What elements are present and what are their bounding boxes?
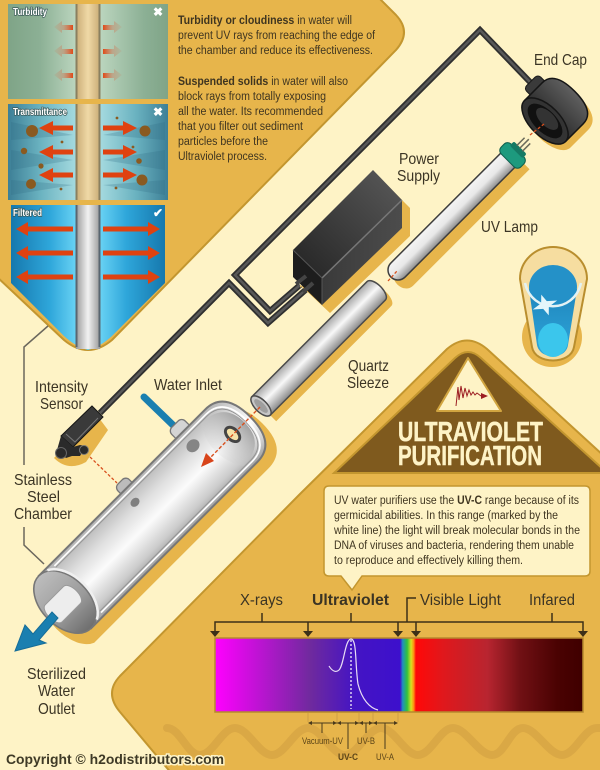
text: suspended solids paragraph: block rays from totally exposing <box>178 91 326 103</box>
cylinder <box>14 383 276 645</box>
callout: germicidal abilities. In this range (marked by the <box>334 510 558 522</box>
label: quartz sleeze: Quartz <box>348 358 389 375</box>
uv-c marker <box>350 640 352 709</box>
spectrum labels: Infared <box>529 592 575 609</box>
callout <box>324 486 590 590</box>
callout: DNA of viruses and bacteria, rendering them unable <box>334 540 574 552</box>
text: suspended solids paragraph: that you filter out sediment <box>178 121 304 133</box>
label: stainless steel chamber: Stainless <box>14 472 72 489</box>
uv range scale: UV-A <box>376 752 394 762</box>
leader line: stainless steel chamber <box>24 326 48 564</box>
callout: to reproduce and effectively killing them. <box>334 555 523 567</box>
arrows <box>16 222 160 284</box>
label: stainless steel chamber: Steel <box>27 489 60 506</box>
uv range scale <box>302 713 398 762</box>
text: turbidity paragraph <box>178 15 376 57</box>
label: turbidity: Turbidity <box>13 7 47 18</box>
power supply <box>293 170 410 313</box>
dashed line: lamp to cap <box>388 124 544 281</box>
icon: glass of water <box>520 247 587 367</box>
label: quartz sleeze: Sleeze <box>347 375 389 392</box>
uv range scale: UV-B <box>357 736 375 746</box>
spectrum brackets <box>210 598 588 637</box>
spectrum labels: Visible Light <box>420 592 502 609</box>
text: turbidity paragraph: the chamber and reduce its effectiveness. <box>178 45 373 57</box>
dashed line: sensor to chamber <box>90 457 117 483</box>
arrow: sterilized water outlet <box>15 612 58 651</box>
label: intensity sensor: Sensor <box>40 396 84 413</box>
label: water inlet: Water Inlet <box>154 377 222 394</box>
label: quartz sleeze <box>347 358 389 392</box>
panel: transmittance <box>8 104 168 200</box>
label: transmittance: Transmittance <box>13 107 67 118</box>
intensity sensor <box>54 406 108 466</box>
label: sterilized water outlet: Water <box>38 683 76 700</box>
arrows <box>39 121 137 182</box>
label: power supply: Power <box>399 151 440 168</box>
uv range scale: Vacuum-UV <box>302 736 343 746</box>
cables <box>100 30 530 413</box>
label: power supply: Supply <box>397 168 440 185</box>
end cap <box>508 64 600 158</box>
label: intensity sensor <box>35 379 88 413</box>
text: suspended solids paragraph: Ultraviolet process. <box>178 151 267 163</box>
icon: uv wave <box>437 358 501 411</box>
uv lamp <box>381 129 539 293</box>
label: end cap: End Cap <box>534 52 587 69</box>
icon: cross: ✖ <box>153 5 163 19</box>
quartz sleeve <box>248 277 396 421</box>
shadow <box>31 398 288 655</box>
title: ULTRAVIOLET <box>398 416 543 447</box>
callout: UV water purifiers use the UV-C range because of its <box>334 495 579 507</box>
title: PURIFICATION <box>398 440 542 471</box>
spectrum labels: X-rays <box>240 592 283 609</box>
label: sterilized water outlet: Outlet <box>38 701 75 718</box>
icon: cross: ✖ <box>153 105 163 119</box>
text: suspended solids paragraph: all the water. Its recommended <box>178 106 323 118</box>
decorative brown wave <box>167 728 600 755</box>
text: suspended solids paragraph <box>178 76 348 163</box>
panel: turbidity <box>8 4 168 99</box>
text: turbidity paragraph: Turbidity or cloudiness in water will <box>178 15 352 27</box>
title <box>398 416 543 471</box>
label: intensity sensor: Intensity <box>35 379 88 396</box>
panel: filtered <box>11 205 165 350</box>
spectrum labels: Ultraviolet <box>312 592 390 609</box>
text: turbidity paragraph: prevent UV rays from reaching the edge of <box>178 30 376 42</box>
panel: water clarity <box>0 0 404 350</box>
label: filtered: Filtered <box>13 208 42 219</box>
spectrum labels <box>240 592 575 609</box>
copyright: Copyright © h2odistributors.com <box>6 751 224 767</box>
label: sterilized water outlet: Sterilized <box>27 666 86 683</box>
spectrum chart <box>215 638 583 712</box>
heading triangle <box>334 352 600 473</box>
icon: check: ✔ <box>153 206 163 220</box>
dashed arrow: sleeve into chamber <box>201 407 260 467</box>
faded arrows <box>54 21 122 81</box>
label: power supply <box>397 151 440 185</box>
label: uv lamp: UV Lamp <box>481 219 538 236</box>
label: sterilized water outlet <box>27 666 86 718</box>
uv range scale: UV-C <box>338 752 358 762</box>
label: stainless steel chamber: Chamber <box>14 506 73 523</box>
panel: ultraviolet purification <box>112 340 600 770</box>
label: stainless steel chamber <box>14 472 73 523</box>
sediment particles <box>21 117 150 190</box>
water inlet pipe <box>144 397 175 427</box>
callout: white line) the light will break molecular bonds in the <box>333 525 580 537</box>
curve <box>329 639 378 710</box>
text: suspended solids paragraph: particles before the <box>178 136 268 148</box>
stainless steel chamber <box>14 383 288 655</box>
text: suspended solids paragraph: Suspended solids in water will also <box>178 76 348 88</box>
